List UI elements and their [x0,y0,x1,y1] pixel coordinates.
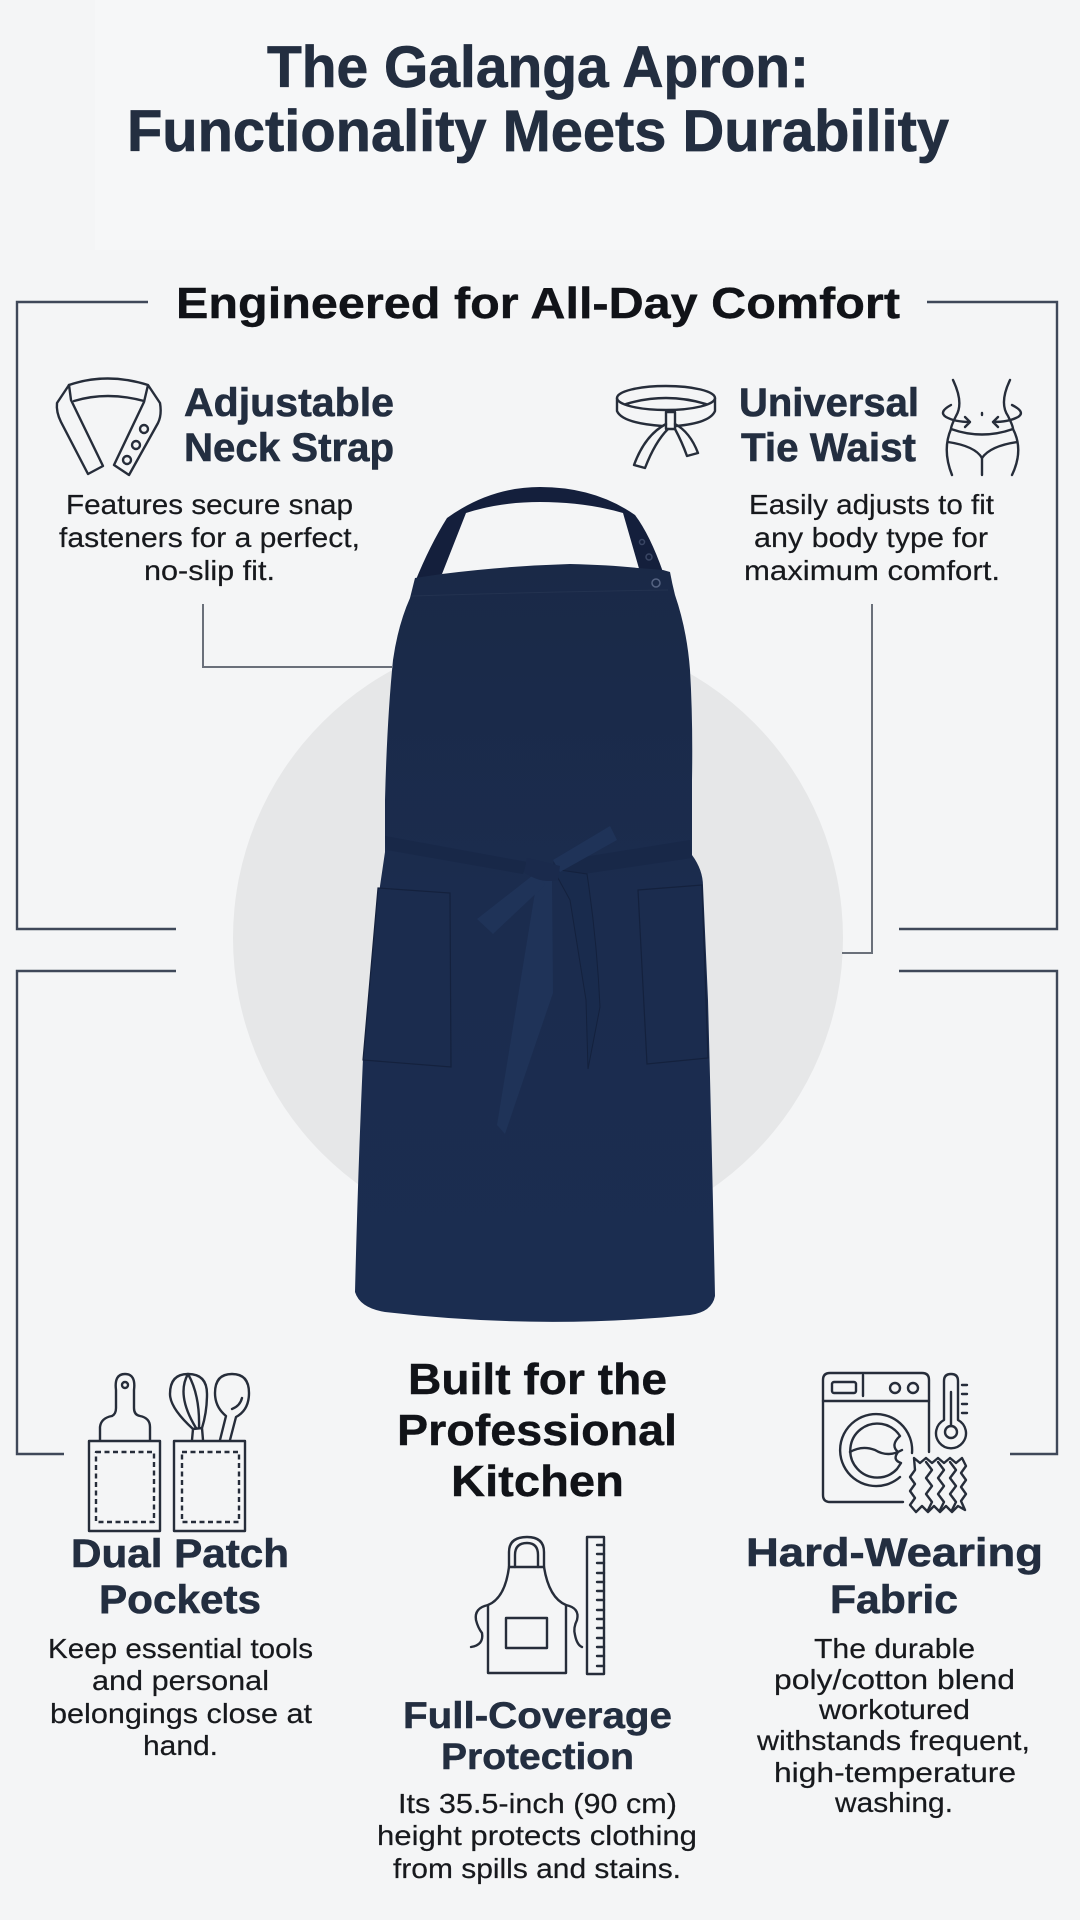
title: The Galanga Apron: [267,35,809,100]
text: pockets description: belongings close at [50,1698,312,1729]
heading: dual patch pockets: Pockets [99,1578,261,1622]
text: fabric description: withstands frequent, [756,1725,1030,1756]
section heading: professional kitchen: Professional [397,1406,677,1455]
text: pockets description: and personal [92,1665,269,1696]
apron tie knot [524,858,560,881]
icon: neck strap collar [57,378,161,475]
text: tie waist description [744,489,1000,586]
title [127,35,949,164]
text: tie waist description: maximum comfort. [744,555,1000,586]
apron tie long tail [497,880,553,1134]
section heading: comfort: Engineered for All-Day Comfort [176,279,900,328]
heading: universal tie waist: Tie Waist [741,426,916,470]
text: pockets description [48,1633,313,1761]
text: tie waist description: Easily adjusts to fit [749,489,994,520]
text: fabric description [756,1633,1030,1818]
apron body [355,564,715,1322]
text: protection description [377,1788,697,1884]
icon: waist [943,380,1021,475]
frame: bottom right [899,971,1057,1454]
frame: bottom left [17,971,176,1454]
heading: dual patch pockets: Dual Patch [71,1532,289,1576]
apron illustration [355,487,715,1322]
text: neck strap description: no-slip fit. [144,555,275,586]
text: fabric description: washing. [834,1787,953,1818]
heading: full-coverage protection [403,1695,672,1777]
text: neck strap description: fasteners for a perfect, [59,522,360,553]
apron tie left tail [477,872,545,934]
heading: full-coverage protection: Full-Coverage [403,1695,672,1736]
heading: universal tie waist: Universal [739,381,919,425]
heading: full-coverage protection: Protection [441,1736,634,1777]
text: fabric description: workotured [818,1694,970,1725]
heading: hard-wearing fabric: Hard-Wearing [746,1531,1043,1575]
heading: universal tie waist [739,381,919,470]
text: protection description: height protects clothing [377,1820,697,1851]
text: neck strap description [59,489,360,586]
apron left pocket [363,888,451,1067]
text: pockets description: hand. [143,1730,218,1761]
icon: washing machine, thermometer and fabric [823,1373,967,1512]
callout line: tie waist [842,604,872,953]
section heading: professional kitchen: Kitchen [451,1457,624,1506]
text: fabric description: The durable [814,1633,975,1664]
frame: top right [899,302,1057,929]
background circle [233,633,843,1243]
text: pockets description: Keep essential tools [48,1633,313,1664]
icon: belt [617,386,715,468]
text: fabric description: high-temperature [774,1757,1016,1788]
callout line: neck strap [203,604,392,667]
icon: apron with ruler [471,1537,604,1674]
text: fabric description: poly/cotton blend [774,1664,1015,1695]
text: protection description: Its 35.5-inch (90 cm) [398,1788,677,1819]
text: neck strap description: Features secure snap [66,489,353,520]
apron tie long tail behind [553,869,600,1069]
section heading: professional kitchen: Built for the [408,1355,667,1404]
heading: adjustable neck strap [184,381,394,470]
apron neck strap [415,487,663,582]
heading: hard-wearing fabric [746,1531,1043,1622]
heading: adjustable neck strap: Neck Strap [184,426,394,470]
heading: adjustable neck strap: Adjustable [184,381,394,425]
apron snaps [640,540,660,587]
section heading: professional kitchen [397,1355,677,1506]
frame: top left [17,302,176,929]
text: tie waist description: any body type for [754,522,988,553]
text: protection description: from spills and stains. [393,1853,681,1884]
title: Functionality Meets Durability [127,99,949,164]
apron tie bow loop [553,826,617,872]
icon: pockets with kitchen tools [89,1374,249,1531]
heading: dual patch pockets [71,1532,289,1622]
apron waist tie band [385,836,692,878]
apron right pocket [638,885,708,1064]
heading: hard-wearing fabric: Fabric [830,1578,958,1622]
